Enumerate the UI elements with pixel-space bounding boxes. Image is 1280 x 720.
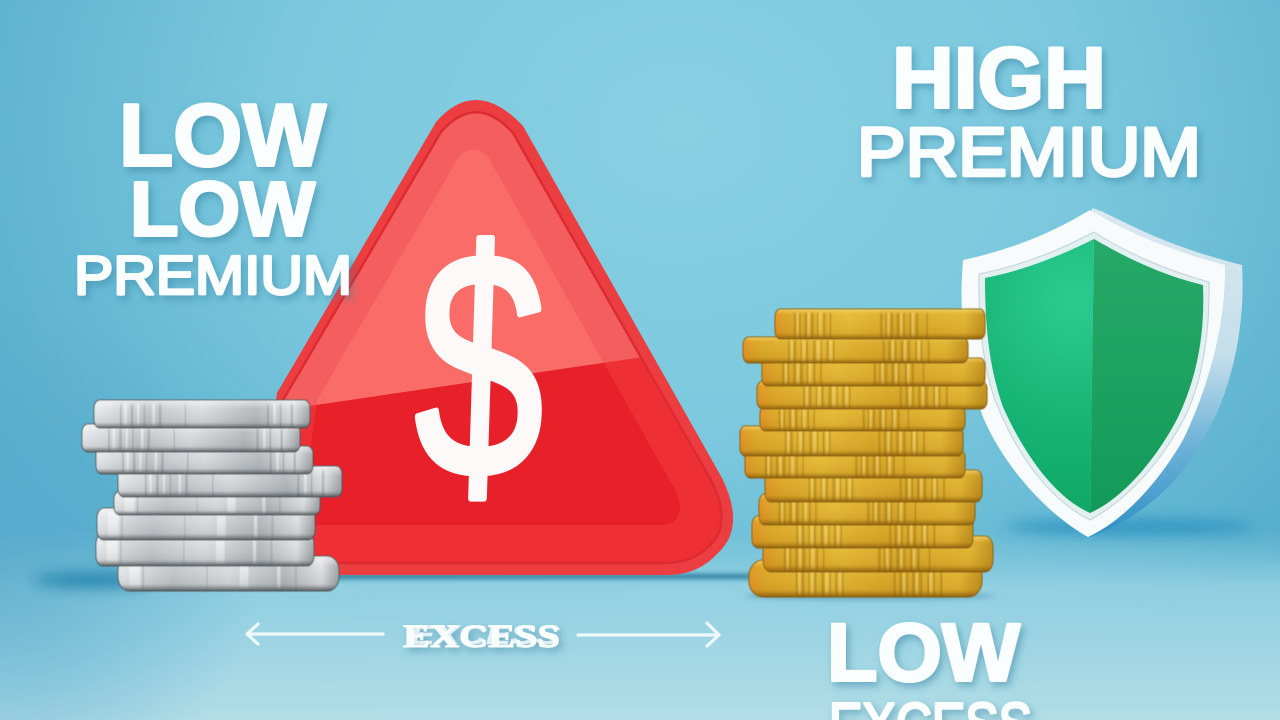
heading: low low premium: LOW (130, 166, 315, 252)
excess double arrow label (247, 619, 719, 655)
heading: low low premium: PREMIUM (74, 244, 352, 306)
dollar sign: $ (411, 187, 550, 545)
shield back edge (1090, 208, 1243, 537)
red warning triangle with dollar sign (255, 100, 733, 575)
triangle face (280, 112, 722, 563)
heading: high premium: HIGH (892, 30, 1106, 126)
heading: high premium (857, 30, 1201, 190)
triangle rim (255, 100, 733, 575)
right arrow (578, 623, 719, 646)
excess label: EXCESS (410, 620, 560, 650)
shield white rim (962, 210, 1225, 537)
silver coin stack (82, 400, 342, 591)
ground shadows (33, 519, 1255, 600)
heading: low excess: LOW (827, 608, 1021, 698)
left arrow (247, 624, 383, 644)
shield green face (985, 239, 1203, 513)
shield inner outline (979, 232, 1209, 520)
gold coin stack (740, 309, 993, 597)
heading: low low premium: LOW (119, 86, 326, 184)
excess label: EXCESS (403, 619, 560, 655)
heading: high premium: PREMIUM (857, 114, 1201, 190)
heading: low low premium (74, 86, 352, 306)
green shield (962, 208, 1243, 537)
